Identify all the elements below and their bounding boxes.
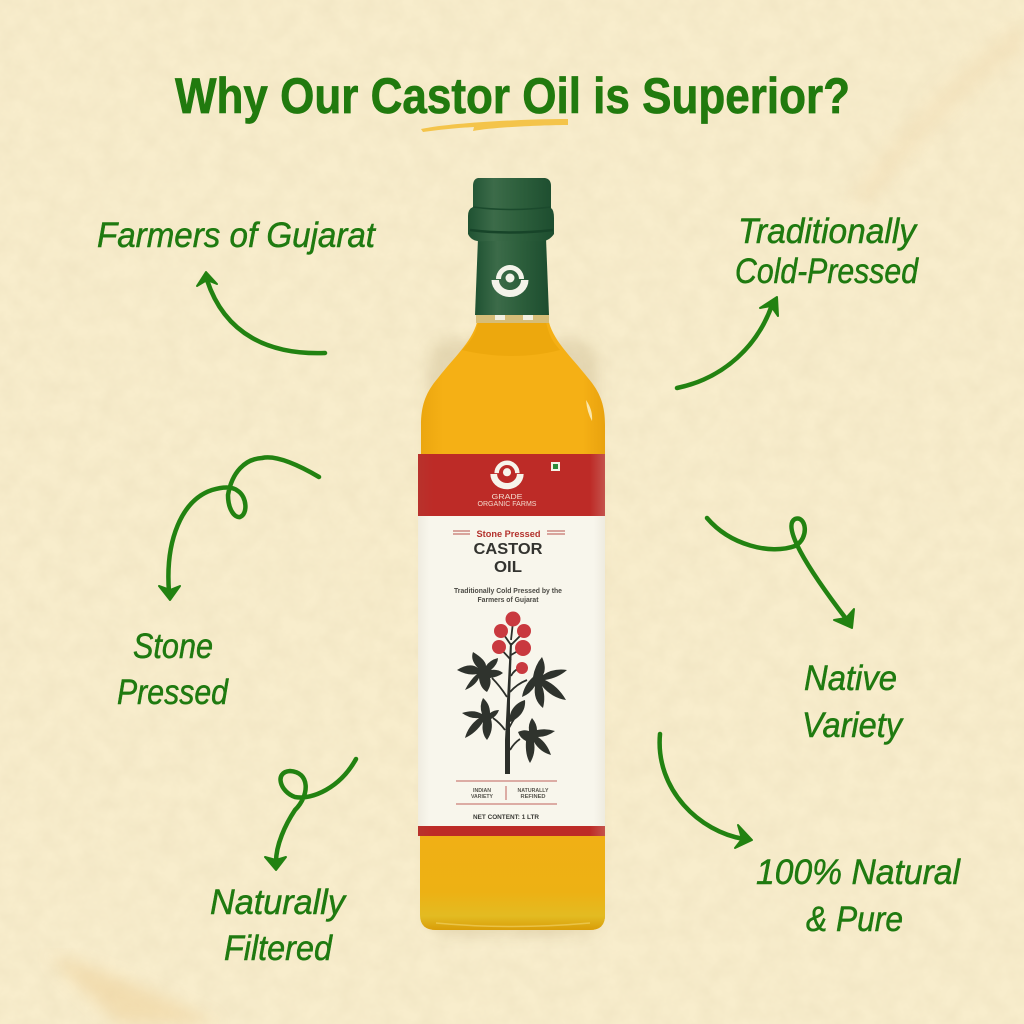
callout: traditionally cold-pressed: Cold-Pressed <box>735 252 919 291</box>
label details: NATURALLY <box>518 788 549 794</box>
bottle base highlight <box>436 923 590 926</box>
callout: farmers of gujarat <box>97 216 376 353</box>
callout: naturally filtered <box>210 759 356 968</box>
callout: traditionally cold-pressed <box>677 212 919 388</box>
label red bottom strip <box>418 826 605 836</box>
callout: naturally filtered: Filtered <box>224 929 333 968</box>
arrow <box>707 518 854 628</box>
castor plant illustration <box>457 612 567 774</box>
neck logo <box>492 265 528 297</box>
bottle <box>418 178 605 935</box>
stone pressed text: Stone Pressed <box>476 529 540 539</box>
arrow <box>159 457 319 600</box>
callout: stone pressed: Pressed <box>117 673 229 712</box>
callout: 100% natural and pure: & Pure <box>806 900 903 939</box>
label details <box>456 781 557 804</box>
callout: stone pressed <box>117 457 319 712</box>
label red top band <box>418 454 605 516</box>
title underline swoosh <box>421 119 568 132</box>
arrow <box>197 272 325 353</box>
callout: farmers of gujarat: Farmers of Gujarat <box>97 216 376 255</box>
lower oil <box>420 836 605 930</box>
product name: OIL <box>494 559 522 576</box>
veg mark <box>551 462 560 471</box>
arrow <box>265 759 356 870</box>
callout: 100% natural and pure: 100% Natural <box>756 853 961 892</box>
callout: stone pressed: Stone <box>133 627 213 666</box>
callout: naturally filtered: Naturally <box>210 883 347 922</box>
product name: CASTOR <box>474 541 542 558</box>
arrow <box>677 297 778 388</box>
bottle glass and oil <box>421 318 605 930</box>
oil surface shade <box>462 322 560 356</box>
callout: 100% natural and pure <box>660 734 961 939</box>
arrow <box>660 734 752 848</box>
brand logo <box>490 460 524 489</box>
neck <box>475 238 549 315</box>
tagline: Traditionally Cold Pressed by the <box>454 588 562 595</box>
brand name: GRADE <box>492 492 522 501</box>
callout: traditionally cold-pressed: Traditionally <box>738 212 918 251</box>
castor seed clusters <box>492 612 531 674</box>
label details: INDIAN <box>473 788 491 794</box>
callout: native variety: Native <box>804 659 897 698</box>
net content: NET CONTENT: 1 LTR <box>473 814 539 821</box>
label details: VARIETY <box>471 794 493 800</box>
title: Why Our Castor Oil is Superior? <box>175 68 850 124</box>
brand name: ORGANIC FARMS <box>478 501 537 508</box>
callout: native variety <box>707 518 904 745</box>
callout: native variety: Variety <box>802 706 904 745</box>
leaves <box>457 652 567 763</box>
label <box>418 454 605 836</box>
bottle shadow <box>428 340 598 935</box>
label details: REFINED <box>520 794 546 800</box>
label white panel <box>418 516 605 826</box>
highlight <box>586 400 592 421</box>
tagline: Farmers of Gujarat <box>478 597 539 604</box>
brand name <box>478 492 537 508</box>
cap <box>468 178 554 241</box>
product name <box>474 541 542 576</box>
clear collar <box>476 315 549 323</box>
stone pressed text <box>453 529 565 539</box>
tagline <box>454 588 562 604</box>
